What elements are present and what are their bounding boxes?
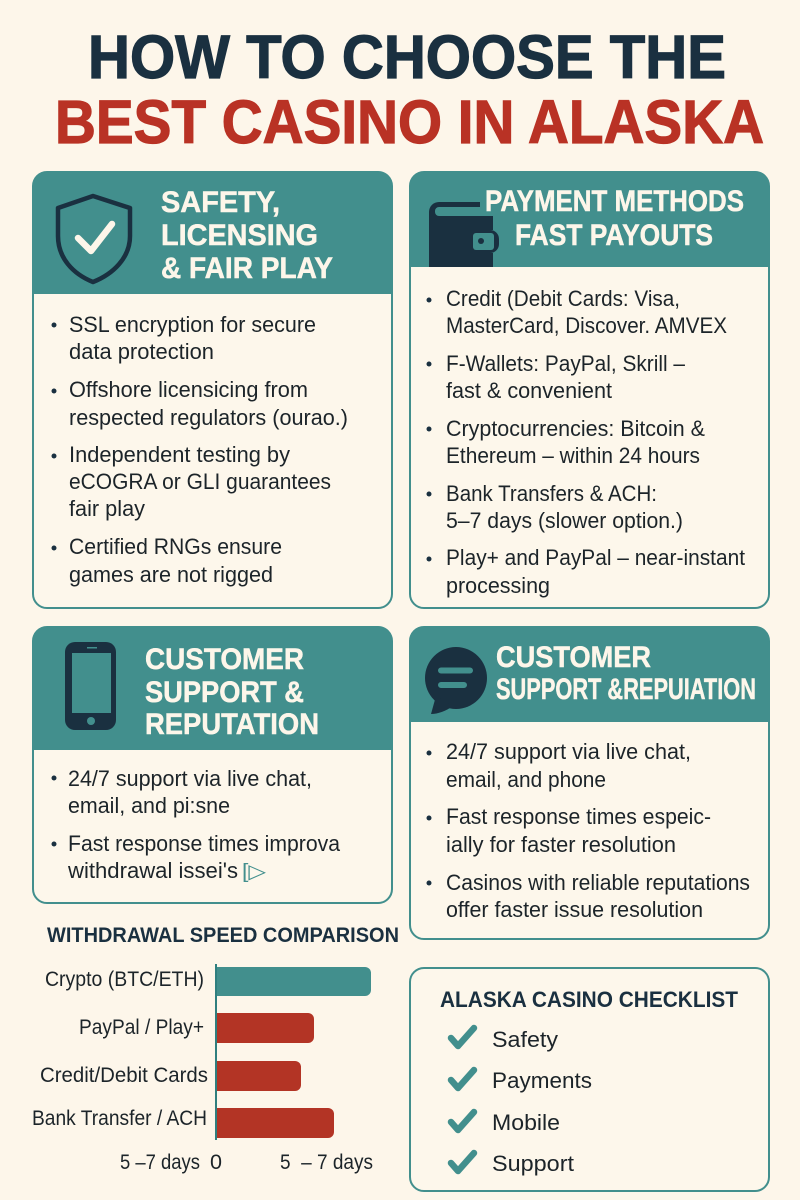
text block: reputation bullets: Casinos with reliable reputations (446, 870, 750, 895)
text block: reputation bullets: 24/7 support via live chat, (446, 739, 691, 764)
heading: customer support and reputation (496, 641, 756, 706)
text block: reputation bullets: Fast response times espeic- (446, 804, 711, 829)
text block: payment bullets: Credit (Debit Cards: Visa, (446, 286, 680, 311)
title: BEST CASINO IN ALASKA (55, 88, 764, 156)
text block: safety bullets: games are not rigged (69, 562, 273, 587)
heading: customer support and reputation (145, 643, 319, 741)
panel: payment methods and fast payouts (410, 172, 769, 608)
heading: customer support and reputation: REPUTATION (145, 708, 319, 741)
text block: payment bullets: Ethereum – within 24 hours (446, 443, 700, 468)
heading: safety, licensing and fair play: LICENSING (161, 219, 318, 252)
checklist item: safety: Safety (492, 1027, 558, 1052)
heading: safety, licensing and fair play: & FAIR PLAY (161, 252, 333, 285)
panel: safety, licensing and fair play (33, 172, 392, 608)
heading: payment methods and fast payouts: PAYMENT METHODS (485, 185, 744, 218)
heading: customer support and reputation: CUSTOMER (145, 643, 304, 676)
axis labels: 5 –7 days (120, 1151, 200, 1174)
checklist item: payments: Payments (492, 1068, 592, 1093)
category labels: Crypto (BTC/ETH) (45, 968, 204, 991)
text block: safety bullets: SSL encryption for secure (69, 312, 316, 337)
checklist item: mobile: Mobile (492, 1110, 560, 1135)
checklist heading: ALASKA CASINO CHECKLIST (440, 987, 739, 1012)
text block: payment bullets: F-Wallets: PayPal, Skrill – (446, 351, 686, 376)
heading: safety, licensing and fair play (161, 186, 333, 285)
text block: payment bullets: Bank Transfers & ACH: (446, 481, 657, 506)
text block: payment bullets: Cryptocurrencies: Bitcoin & (446, 416, 705, 441)
checklist item: safety (451, 1027, 558, 1052)
category labels: PayPal / Play+ (79, 1016, 204, 1039)
title: HOW TO CHOOSE THE (88, 23, 726, 91)
title (55, 23, 764, 156)
text block: safety bullets: Certified RNGs ensure (69, 534, 282, 559)
heading: safety, licensing and fair play: SAFETY, (161, 186, 280, 219)
heading: payment methods and fast payouts (485, 185, 744, 252)
text block: support bullets: 24/7 support via live chat, (68, 766, 312, 791)
icon: shield with check (58, 196, 130, 282)
bars (217, 967, 371, 1138)
text block: support bullets: [▷ (242, 861, 267, 883)
icon: chat bubble (425, 647, 487, 714)
text block: reputation bullets: ially for faster resolution (446, 832, 676, 857)
panel: customer support and reputation, phone (33, 627, 392, 903)
checklist item: support (451, 1151, 574, 1176)
text block: support bullets: email, and pi:sne (68, 793, 230, 818)
text block: payment bullets: Play+ and PayPal – near-instant (446, 545, 745, 570)
text block: safety bullets: respected regulators (ourao.) (69, 405, 348, 430)
text block: safety bullets: eCOGRA or GLI guarantees (69, 469, 331, 494)
bar chart: withdrawal speed comparison (32, 924, 399, 1174)
text block: reputation bullets (426, 739, 750, 922)
text block: payment bullets: MasterCard, Discover. AMVEX (446, 313, 727, 338)
chart heading: WITHDRAWAL SPEED COMPARISON (47, 924, 399, 947)
checklist item: payments (451, 1068, 592, 1093)
axis labels (120, 1151, 373, 1174)
heading: payment methods and fast payouts: FAST PAYOUTS (515, 219, 713, 252)
category labels: Bank Transfer / ACH (32, 1107, 207, 1130)
text block: support bullets: withdrawal issei's (67, 858, 238, 883)
text block: reputation bullets: offer faster issue resolution (446, 897, 703, 922)
text block: safety bullets (52, 312, 348, 587)
text block: safety bullets: Offshore licensicing from (69, 377, 308, 402)
checklist item: support: Support (492, 1151, 574, 1176)
icon: wallet (429, 202, 499, 267)
category labels (32, 968, 208, 1130)
text block: support bullets: Fast response times improva (68, 831, 341, 856)
category labels: Credit/Debit Cards (40, 1064, 208, 1087)
heading: customer support and reputation: CUSTOMER (496, 641, 651, 674)
text block: safety bullets: data protection (69, 339, 214, 364)
text block: safety bullets: fair play (69, 496, 145, 521)
text block: reputation bullets: email, and phone (446, 767, 606, 792)
panel: alaska casino checklist (410, 968, 769, 1191)
heading: customer support and reputation: SUPPORT & (145, 676, 304, 709)
axis labels: 0 (210, 1151, 222, 1174)
text block: payment bullets (426, 286, 745, 598)
checklist item: mobile (451, 1110, 560, 1135)
text block: support bullets (52, 766, 341, 883)
axis labels: 5 – 7 days (280, 1151, 373, 1174)
text block: payment bullets: fast & convenient (446, 378, 612, 403)
icon: smartphone (65, 642, 116, 730)
text block: payment bullets: 5–7 days (slower option.) (446, 508, 683, 533)
text block: payment bullets: processing (446, 573, 550, 598)
panel: customer support and reputation, chat (410, 627, 769, 939)
text block: safety bullets: Independent testing by (69, 442, 290, 467)
